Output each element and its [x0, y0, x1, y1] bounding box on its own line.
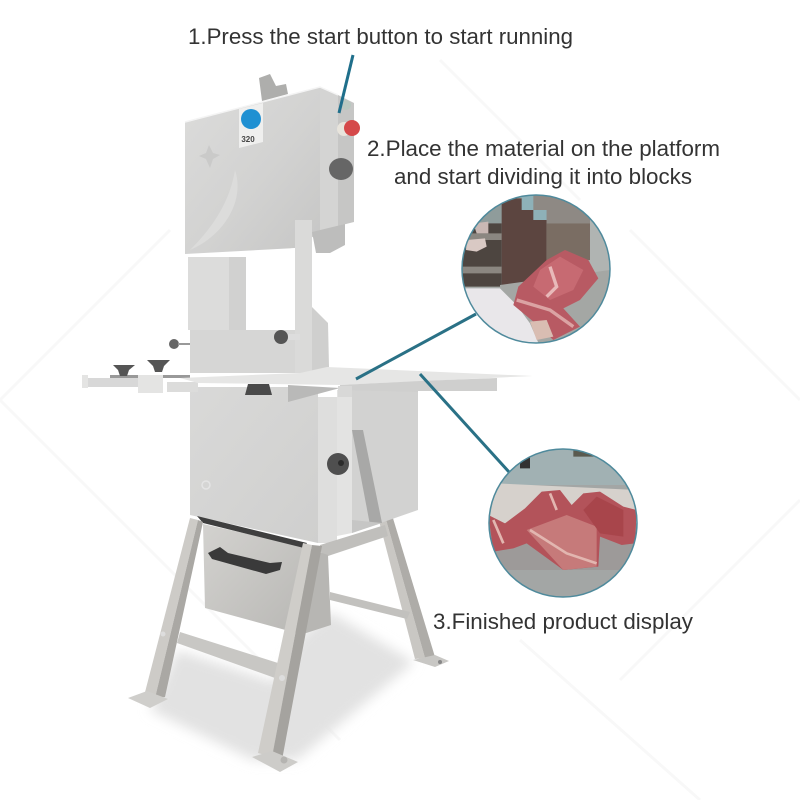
drawer handle: [208, 547, 282, 574]
cabinet strip edge: [337, 390, 352, 536]
rail knob: [147, 360, 170, 372]
top blade adjuster: [259, 74, 288, 101]
back right leg: [378, 515, 449, 667]
rail knob: [113, 365, 135, 376]
photo: cutting meat: [462, 196, 610, 342]
right side cabinet: [352, 388, 418, 533]
callout line: platform to photo: [356, 314, 476, 379]
photo ring: finished product: [489, 449, 637, 597]
head swirl watermark: [190, 170, 238, 250]
frame bar under cabinet: [320, 525, 388, 558]
front cross bar: [177, 632, 278, 678]
gloved hand: [466, 288, 538, 342]
cabinet round mark: [202, 481, 210, 489]
upper saw head: [185, 74, 360, 254]
saw column: [169, 220, 329, 373]
step 2 text: and start dividing it into blocks: [394, 164, 692, 189]
left front leg: [128, 518, 203, 708]
right front leg: [252, 543, 322, 772]
step 2 text: [367, 136, 720, 189]
cabinet side knob: [327, 453, 349, 475]
callout line: table to finished photo: [420, 374, 509, 472]
photo: finished product: [490, 450, 636, 596]
lower head bracket: [312, 224, 345, 253]
callout line: start button: [339, 55, 353, 113]
step 2 text: 2.Place the material on the platform: [367, 136, 720, 161]
floor shadow: [150, 612, 414, 760]
model badge: 320: [241, 135, 255, 144]
collection drawer: [197, 516, 331, 635]
side screw: [169, 339, 190, 349]
photo ring: cutting meat: [462, 195, 610, 343]
lower cabinet front: [190, 387, 318, 543]
blade guide knob: [274, 330, 300, 344]
step 3 text: 3.Finished product display: [433, 609, 693, 634]
lower cabinet front strip: [318, 397, 337, 543]
model badge: [239, 103, 263, 148]
speed dial: [329, 158, 353, 180]
sliding table rail: [82, 360, 198, 393]
head star mark: [199, 145, 220, 168]
start button: [341, 100, 351, 110]
step 1 text: 1.Press the start button to start running: [188, 24, 573, 49]
rear cross bar: [330, 592, 410, 619]
bone saw machine: [82, 74, 533, 772]
work table: [180, 367, 533, 402]
raw meat: [513, 250, 598, 340]
red stop knob: [337, 120, 360, 136]
table knob: [245, 384, 272, 395]
